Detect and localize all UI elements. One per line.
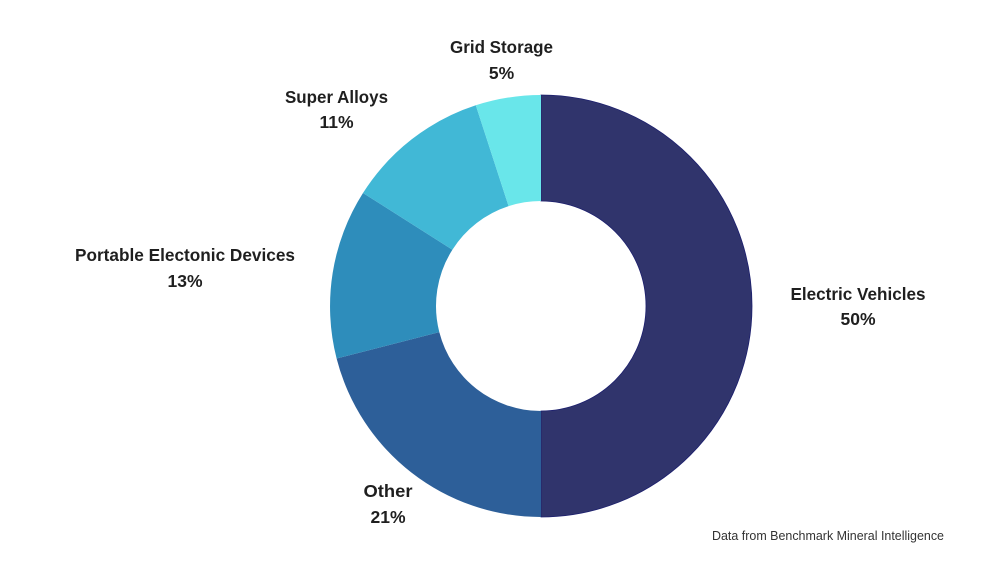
segment: Super Alloys 11% bbox=[363, 105, 509, 250]
label: Grid Storage: Grid Storage bbox=[450, 37, 553, 57]
label: Electric Vehicles: Electric Vehicles bbox=[790, 284, 926, 304]
segment: Portable Electronic Devices 13% bbox=[330, 193, 452, 358]
label: Other bbox=[364, 481, 413, 527]
label: Super Alloys: 11% bbox=[319, 112, 354, 132]
label: Electric Vehicles: 50% bbox=[840, 309, 876, 329]
label: Grid Storage bbox=[450, 37, 553, 83]
source note: Data from Benchmark Mineral Intelligence bbox=[712, 529, 944, 543]
segment: Other 21% bbox=[337, 332, 541, 517]
label: Other: Other bbox=[364, 481, 413, 501]
label: Other: 21% bbox=[370, 507, 406, 527]
segment: Electric Vehicles 50% bbox=[541, 95, 752, 517]
label: Portable Electonic Devices bbox=[75, 245, 295, 291]
label: Portable Electonic Devices: Portable Electonic Devices bbox=[75, 245, 295, 265]
label: Electric Vehicles bbox=[790, 284, 926, 329]
donut chart bbox=[330, 95, 752, 517]
label: Portable Electonic Devices: 13% bbox=[167, 271, 203, 291]
label: Super Alloys bbox=[285, 87, 388, 132]
label: Grid Storage: 5% bbox=[489, 63, 515, 83]
label: Super Alloys: Super Alloys bbox=[285, 87, 388, 107]
segment: Grid Storage 5% bbox=[476, 95, 541, 206]
